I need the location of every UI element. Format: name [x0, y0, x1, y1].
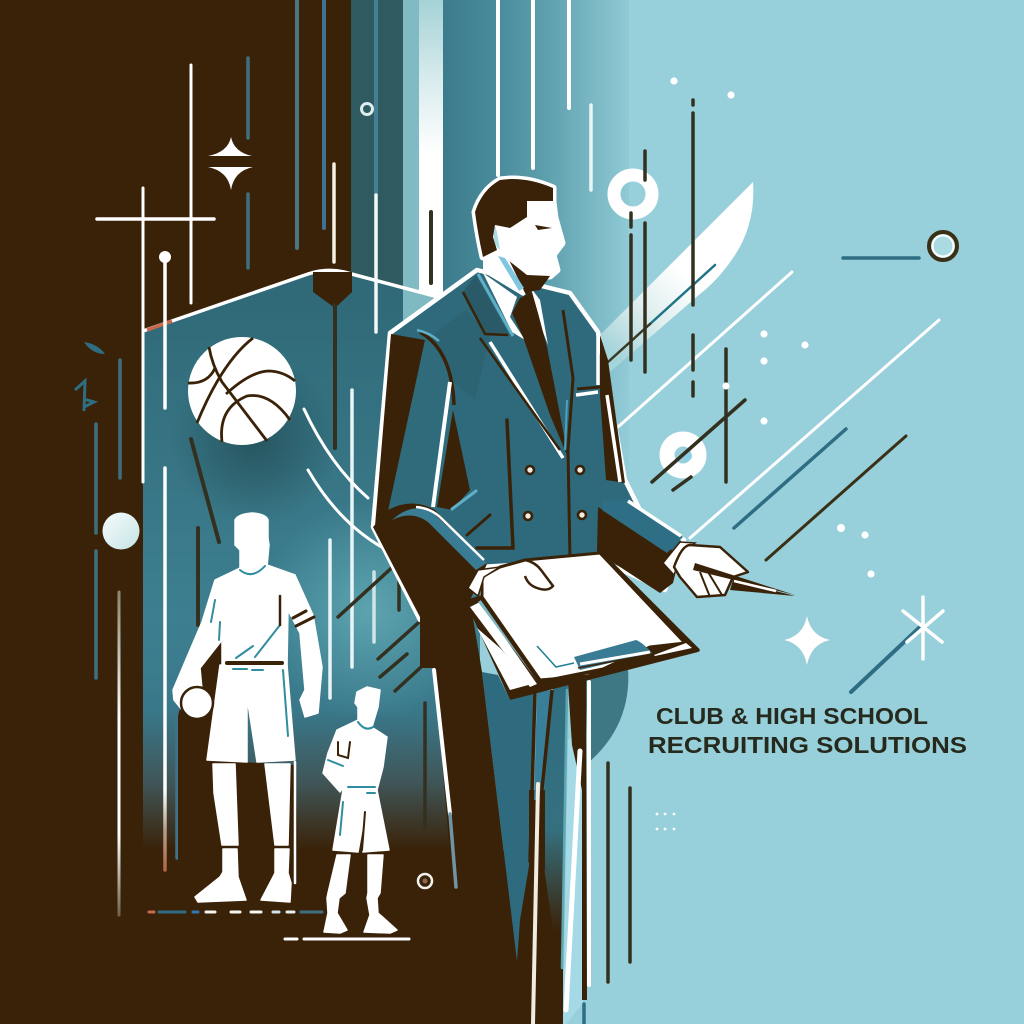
lower white sheet: [477, 628, 532, 690]
four-point sparkle split: [208, 137, 253, 190]
right jacket edge: [600, 335, 625, 483]
brown vertical lines right: [608, 100, 745, 982]
title text: CLUB & HIGH SCHOOL: [656, 703, 928, 729]
teal wedge between legs: [482, 672, 535, 962]
background: pale column: [403, 0, 419, 340]
lower brown ground: [0, 850, 563, 1024]
trouser highlights: [434, 670, 589, 1024]
outer white sheet: [470, 602, 537, 687]
title text: [648, 703, 967, 758]
vertical accent lines, left: [96, 0, 591, 915]
right edge white: [598, 333, 620, 482]
half circle behind clipboard: [585, 668, 628, 763]
neck shadow: [508, 258, 550, 295]
title text: RECRUITING SOLUTIONS: [648, 732, 967, 758]
left leg: [420, 600, 563, 1024]
lapel white stripe: [490, 342, 563, 458]
upper lapel: [463, 275, 510, 336]
background: dark teal column: [351, 0, 403, 300]
leaf mark: [84, 342, 105, 354]
sleeve white stripe: [433, 382, 450, 507]
light placket stripe: [565, 400, 567, 450]
pen: [693, 563, 795, 597]
trouser crease lines: [530, 690, 552, 862]
neck: [483, 250, 540, 296]
pale patch under roof: [403, 287, 443, 328]
ring target: [929, 232, 957, 260]
teal panel behind the figures: [143, 270, 480, 860]
jacket body: [373, 270, 684, 620]
sleeve cuff ticks: [452, 491, 490, 535]
ear shade: [494, 226, 500, 250]
short player details: [328, 722, 375, 850]
small teal glyph: [75, 381, 94, 411]
left cuff: [468, 567, 500, 596]
clipboard outer edge: [480, 552, 698, 682]
roof line: [143, 270, 442, 331]
panel light glow: [260, 500, 480, 720]
small ring lower: [418, 874, 432, 888]
paper lower sheets: [465, 552, 698, 700]
background: glowing white column: [419, 0, 443, 340]
hanging spade shape: [313, 272, 352, 448]
teal trouser panel: [543, 684, 568, 975]
right diagonal lines: [608, 258, 939, 692]
head white outline: [475, 179, 562, 276]
face: [493, 201, 562, 275]
right hand: [674, 545, 748, 597]
tie: [512, 292, 567, 455]
coach figure: [373, 179, 795, 1024]
shoulder grain: [425, 310, 490, 400]
pin with dot: [159, 251, 171, 263]
clip: [574, 640, 652, 670]
panel ball shadow: [170, 355, 340, 525]
white blade shape: [600, 182, 753, 372]
held ball: [181, 687, 213, 719]
player body: [173, 513, 322, 902]
shirt left collar: [483, 273, 525, 340]
sleeve outline: [420, 332, 454, 405]
jacket shadow panel: [375, 334, 425, 526]
background: teal gradient band: [443, 0, 628, 432]
brown shadow behind player: [178, 630, 300, 900]
brown diagonal strokes: [338, 563, 427, 828]
jacket buttons: [524, 466, 586, 520]
jacket seam: [477, 420, 513, 548]
sleeve white line: [416, 507, 484, 560]
basketball: [188, 337, 296, 445]
brown trouser fill: [529, 790, 545, 870]
blue sheet edge: [478, 598, 543, 682]
upper lapel outline: [463, 292, 508, 335]
broken ring: [667, 439, 699, 471]
breast pocket: [576, 387, 600, 395]
right arm shadow: [597, 507, 680, 593]
short player: [323, 687, 397, 933]
lapel light edge: [478, 274, 513, 336]
right sleeve teal: [602, 499, 683, 553]
shirt right collar: [531, 288, 548, 345]
right placket line: [563, 310, 573, 560]
neck light sliver: [498, 256, 524, 291]
white ring: [614, 175, 652, 213]
scattered dots: [670, 77, 875, 578]
sphere: [102, 512, 140, 550]
lapel dark outline: [480, 338, 560, 450]
right sleeve seam: [602, 513, 665, 556]
thumb line: [525, 560, 553, 590]
ground dashes: [149, 912, 409, 939]
sleeve teal strip: [392, 508, 487, 570]
clipboard white strip: [654, 643, 692, 656]
eye: [535, 225, 552, 230]
sparkle: [784, 616, 830, 665]
clipboard paper: [482, 553, 685, 680]
blue trouser strip: [534, 690, 551, 800]
lower sleeve: [373, 504, 487, 640]
tall player: [173, 513, 322, 902]
asterisk sparkle: [903, 597, 943, 659]
right trouser light strip: [563, 730, 583, 1024]
sheet teal corner: [537, 646, 574, 667]
background: dark brown field: [0, 0, 351, 1024]
right sleeve white stripe: [628, 501, 681, 536]
hair: [475, 179, 553, 257]
sleeve light accent: [417, 330, 439, 341]
torso shadow triangle: [437, 410, 470, 510]
right cuff: [663, 542, 695, 575]
tiny dot grid: [656, 813, 675, 830]
inner sleeve: [388, 330, 453, 511]
jersey details: [211, 566, 314, 883]
small ring top: [362, 104, 372, 114]
right leg: [568, 680, 587, 1000]
